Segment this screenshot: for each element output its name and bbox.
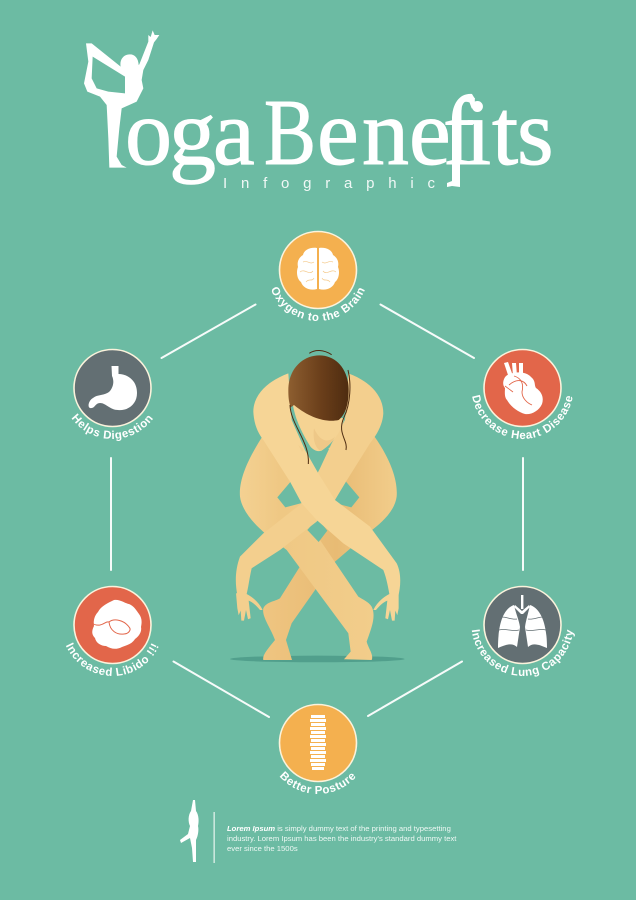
nose shading (314, 428, 335, 451)
face (293, 403, 344, 451)
subtitle: Infographic (223, 175, 436, 192)
node: increased libido (66, 586, 158, 676)
leg: left thigh to right foot (240, 435, 374, 660)
title text: B (264, 81, 316, 185)
icon: heart (503, 362, 543, 414)
icon: tree pose figure (180, 800, 199, 862)
connector lines (111, 304, 523, 717)
grey disc (74, 350, 151, 426)
f stem and descender (447, 94, 475, 187)
label: Increased Libido !!! (66, 642, 158, 676)
footer text: Lorem Ipsum is simply dummy text of the printing and typesetting (227, 824, 451, 833)
label: Oxygen to the Brain (272, 287, 365, 321)
label: Increased Lung Capacity (472, 630, 575, 677)
node: oxygen to the brain (272, 230, 365, 321)
label: Better Posture (280, 771, 356, 794)
label: Helps Digestion (72, 413, 153, 441)
icon: stomach (89, 366, 137, 410)
hair strands (290, 350, 350, 464)
footer text: industry. Lorem Ipsum has been the industry's standard dummy text (227, 834, 457, 843)
red disc (74, 586, 151, 664)
title dancer silhouette (84, 30, 159, 168)
label: Decrease Heart Disease (472, 394, 572, 440)
orange disc (280, 704, 356, 782)
title text (125, 81, 554, 185)
fingers right hand (373, 593, 399, 621)
central yoga figure (230, 350, 405, 662)
footer text: ever since the 1500s (227, 844, 298, 853)
title text: oga (125, 81, 255, 185)
far arm: right shoulder to left hand (236, 373, 383, 597)
gap: left (277, 482, 303, 507)
hair (288, 355, 349, 421)
leg: right thigh to left foot (263, 435, 397, 660)
divider (214, 812, 215, 863)
icon: spine (310, 715, 326, 770)
shoulder folds (298, 442, 337, 452)
title text: enefits (317, 81, 554, 185)
node: helps digestion (72, 348, 153, 441)
node: better posture (278, 704, 358, 794)
gap: centre diamond (307, 518, 327, 542)
node: decrease heart disease (472, 348, 572, 440)
gap: right (333, 482, 359, 507)
fingers left hand (236, 593, 263, 621)
orange disc (280, 232, 356, 308)
red disc (484, 350, 561, 426)
title (84, 30, 554, 192)
near arm: left shoulder to right hand (253, 373, 400, 597)
icon: egg and sperm (84, 600, 142, 649)
icon: brain (297, 248, 339, 290)
footer (180, 800, 459, 863)
icon: lungs (498, 595, 547, 648)
node: increased lung capacity (472, 586, 575, 677)
grey disc (484, 586, 561, 664)
ground shadow (230, 656, 405, 662)
